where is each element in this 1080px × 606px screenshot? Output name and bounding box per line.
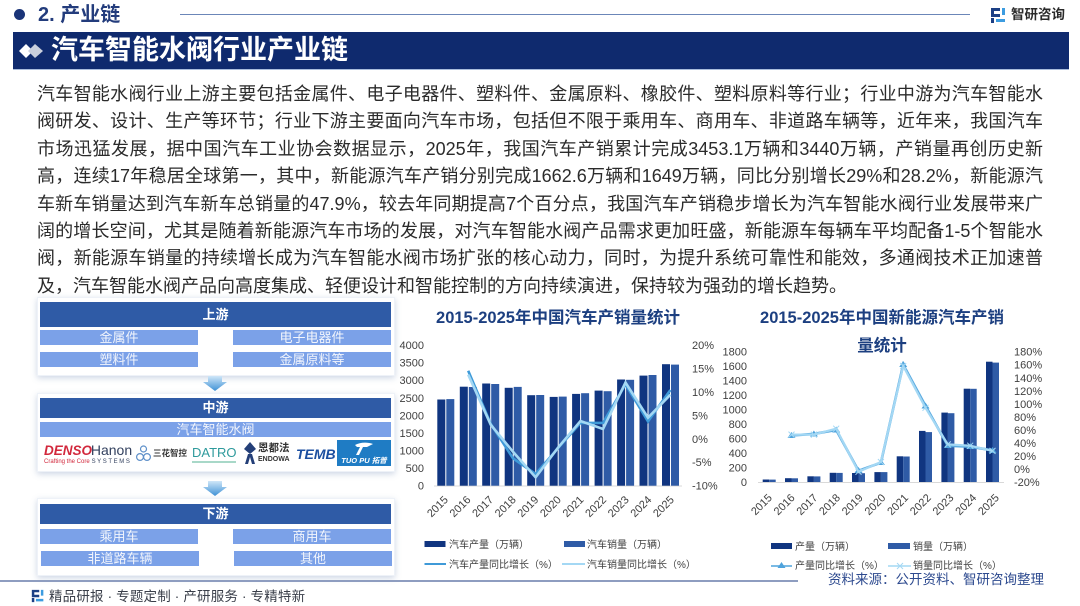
panel: downstream [34, 497, 398, 580]
year labels: 2021 [885, 492, 911, 518]
panel: midstream: 中游 [202, 400, 228, 415]
chart title: 2015-2025年中国新能源汽车产销 [760, 307, 1004, 327]
icon: diamonds [19, 44, 43, 58]
arrow: upstream to midstream [203, 376, 227, 391]
year labels: 2015 [425, 494, 451, 520]
left axis labels: 0 [418, 481, 424, 493]
brand logo [991, 7, 1065, 23]
chart: China NEV production and sales [723, 307, 1042, 572]
right axis labels: -10% [692, 481, 718, 493]
logo: TUOPU: TUO PU 拓普 [341, 456, 387, 465]
year labels: 2020 [538, 494, 564, 520]
logo: Sanhua: 三花智控 [153, 448, 187, 458]
footer slogan: 精品研报 · 专题定制 · 产研服务 · 专精特新 [49, 589, 305, 604]
left axis labels: 800 [729, 419, 747, 431]
right axis labels: 180% [1014, 347, 1042, 359]
legend: 汽车销量（万辆） [587, 538, 667, 551]
year labels: 2022 [583, 494, 609, 520]
sales growth line [468, 375, 670, 477]
legend: 汽车产量（万辆） [449, 538, 529, 551]
intro paragraph: 市场迅猛发展，据中国汽车工业协会数据显示，2025年，我国汽车产销累计完成3453.1万辆和3440万辆，产销量再创历史新 [37, 139, 1043, 159]
panel: upstream: 塑料件 [99, 352, 138, 367]
left axis labels: 2500 [400, 393, 424, 405]
intro paragraph: 高，连续17年稳居全球第一，其中，新能源汽车产销分别完成1662.6万辆和1649万辆，同比分别增长29%和28.2%，新能源汽 [37, 166, 1043, 186]
production bars [763, 362, 992, 482]
right axis labels: 15% [692, 364, 714, 376]
logo: Hanon Systems: Hanon [91, 442, 132, 458]
chart title: 2015-2025年中国汽车产销量统计 [436, 307, 680, 327]
right axis labels: 120% [1014, 386, 1042, 398]
intro paragraph: 阀研发、设计、生产等环节；行业下游主要面向汽车市场，包括但不限于乘用车、商用车、非道路车辆等，近年来，我国汽车 [37, 111, 1043, 131]
panel: downstream: 下游 [202, 506, 228, 521]
legend [424, 538, 696, 571]
left axis labels: 3000 [400, 375, 424, 387]
production bars [437, 364, 670, 486]
right axis labels: -20% [1014, 477, 1040, 489]
chart title [760, 307, 1004, 355]
intro paragraph: 汽车智能水阀行业上游主要包括金属件、电子电器件、塑料件、金属原料、橡胶件、塑料原料等行业；行业中游为汽车智能水 [37, 84, 1043, 104]
year labels: 2016 [448, 494, 473, 520]
intro paragraph [37, 84, 1043, 296]
production growth line [468, 371, 670, 474]
year labels: 2019 [516, 494, 541, 520]
panel: downstream: 非道路车辆 [87, 551, 152, 566]
logo: Endowa: ENDOWA [258, 456, 290, 463]
right axis labels: 40% [1014, 438, 1036, 450]
year labels: 2023 [931, 492, 956, 518]
year labels: 2025 [651, 494, 677, 520]
right axis labels: 60% [1014, 425, 1036, 437]
logo: TEMB: TEMB [296, 446, 336, 462]
left axis labels: 1000 [400, 446, 424, 458]
year labels: 2018 [817, 492, 843, 518]
year labels: 2019 [840, 492, 866, 518]
legend: 汽车销量同比增长（%） [587, 558, 696, 571]
legend [771, 540, 1002, 572]
intro paragraph: 车新车销量达到汽车新车总销量的47.9%，较去年同期提高7个百分点，我国汽车产销稳步增长为汽车智能水阀行业发展带来广 [37, 194, 1043, 214]
legend: 产量同比增长（%） [795, 559, 884, 572]
panel: upstream: 金属原料等 [279, 352, 344, 367]
year labels: 2015 [749, 492, 775, 518]
left axis labels: 4000 [400, 340, 424, 352]
panel: upstream [34, 296, 398, 381]
brand logo: 智研咨询 [1011, 7, 1065, 22]
sales bars [446, 365, 679, 486]
year labels: 2016 [772, 492, 798, 518]
right axis labels: 5% [692, 410, 708, 422]
left axis labels: 1600 [723, 361, 747, 373]
year labels: 2022 [908, 492, 934, 518]
arrow: midstream to downstream [203, 481, 227, 496]
source note: 资料来源：公开资料、智研咨询整理 [828, 572, 1044, 587]
panel: upstream: 金属件 [99, 330, 138, 345]
logo: DATRO: DATRO [192, 445, 237, 460]
year labels: 2018 [493, 494, 519, 520]
left axis labels: 200 [729, 462, 747, 474]
panel: midstream: 汽车智能水阀 [176, 422, 254, 437]
left axis labels: 1800 [723, 347, 747, 359]
left axis labels: 1500 [400, 428, 424, 440]
right axis labels: 140% [1014, 373, 1042, 385]
left axis labels: 1200 [723, 390, 747, 402]
panel: downstream: 商用车 [292, 529, 332, 544]
legend: 汽车产量同比增长（%） [449, 558, 558, 571]
intro paragraph: 阀，新能源车销量的持续增长成为汽车智能水阀市场扩张的核心动力，同时，为提升系统可靠性和能效，多通阀技术正加速普 [37, 248, 1043, 268]
logo: Endowa [244, 442, 290, 464]
logo: DENSO: Crafting the Core [44, 459, 90, 465]
sales growth line [788, 363, 996, 475]
year labels: 2020 [863, 492, 888, 518]
year labels [749, 492, 1002, 518]
right axis labels: -5% [692, 457, 712, 469]
left axis labels: 500 [406, 463, 424, 475]
logo: TUOPU [337, 440, 391, 466]
left axis labels: 3500 [400, 358, 424, 370]
year labels: 2023 [606, 494, 632, 520]
year labels: 2025 [976, 492, 1002, 518]
section heading: 2. 产业链 [38, 4, 120, 26]
year labels: 2024 [629, 494, 654, 520]
logo: DENSO: DENSO [44, 443, 92, 458]
right axis labels: 20% [1014, 451, 1036, 463]
legend: 产量（万辆） [795, 540, 855, 553]
production growth line [788, 361, 996, 473]
company logos [44, 440, 391, 466]
year labels [425, 494, 677, 520]
right axis labels [692, 340, 718, 493]
right axis labels: 0% [1014, 464, 1030, 476]
left axis labels: 2000 [400, 410, 424, 422]
left axis labels: 600 [729, 434, 747, 446]
left axis labels: 1400 [723, 376, 747, 388]
panel: downstream: 乘用车 [99, 529, 138, 544]
title banner [13, 32, 1069, 70]
right axis labels: 80% [1014, 412, 1036, 424]
panel: downstream: 其他 [300, 551, 326, 566]
right axis labels: 0% [692, 434, 708, 446]
year labels: 2017 [470, 494, 496, 520]
right axis labels: 160% [1014, 360, 1042, 372]
logo: DENSO [44, 443, 92, 465]
right axis labels: 10% [692, 387, 714, 399]
year labels: 2017 [795, 492, 820, 518]
sales bars [769, 363, 999, 482]
right axis labels: 20% [692, 340, 714, 352]
logo: Endowa: 恩都法 [258, 442, 290, 454]
right axis labels [1014, 347, 1042, 489]
chart: China auto production and sales [400, 307, 718, 571]
year labels: 2021 [561, 494, 586, 520]
intro paragraph: 阔的增长空间，尤其是随着新能源汽车市场的发展，对汽车智能水阀产品需求更加旺盛，新能源车每辆车平均配备1-5个智能水 [37, 221, 1043, 241]
panel: midstream [34, 392, 398, 477]
logo: Sanhua [136, 445, 187, 461]
left axis labels: 0 [741, 477, 747, 489]
left axis labels: 400 [729, 448, 747, 460]
title banner: 汽车智能水阀行业产业链 [51, 35, 348, 65]
legend: 销量（万辆） [913, 540, 973, 553]
logo: Hanon Systems: SYSTEMS [92, 459, 131, 465]
year labels: 2024 [953, 492, 979, 518]
legend: 销量同比增长（%） [913, 559, 1002, 572]
left axis labels: 1000 [723, 405, 747, 417]
chart title: 量统计 [857, 335, 907, 355]
panel: upstream: 电子电器件 [279, 330, 344, 345]
intro paragraph: 及，汽车智能水阀产品向高度集成、轻便设计和智能控制的方向持续演进，保持较为强劲的增长趋势。 [37, 276, 847, 296]
logo: Hanon Systems [91, 442, 132, 465]
right axis labels: 100% [1014, 399, 1042, 411]
panel: upstream: 上游 [202, 307, 228, 322]
left axis labels [723, 347, 747, 489]
left axis labels [400, 340, 424, 493]
